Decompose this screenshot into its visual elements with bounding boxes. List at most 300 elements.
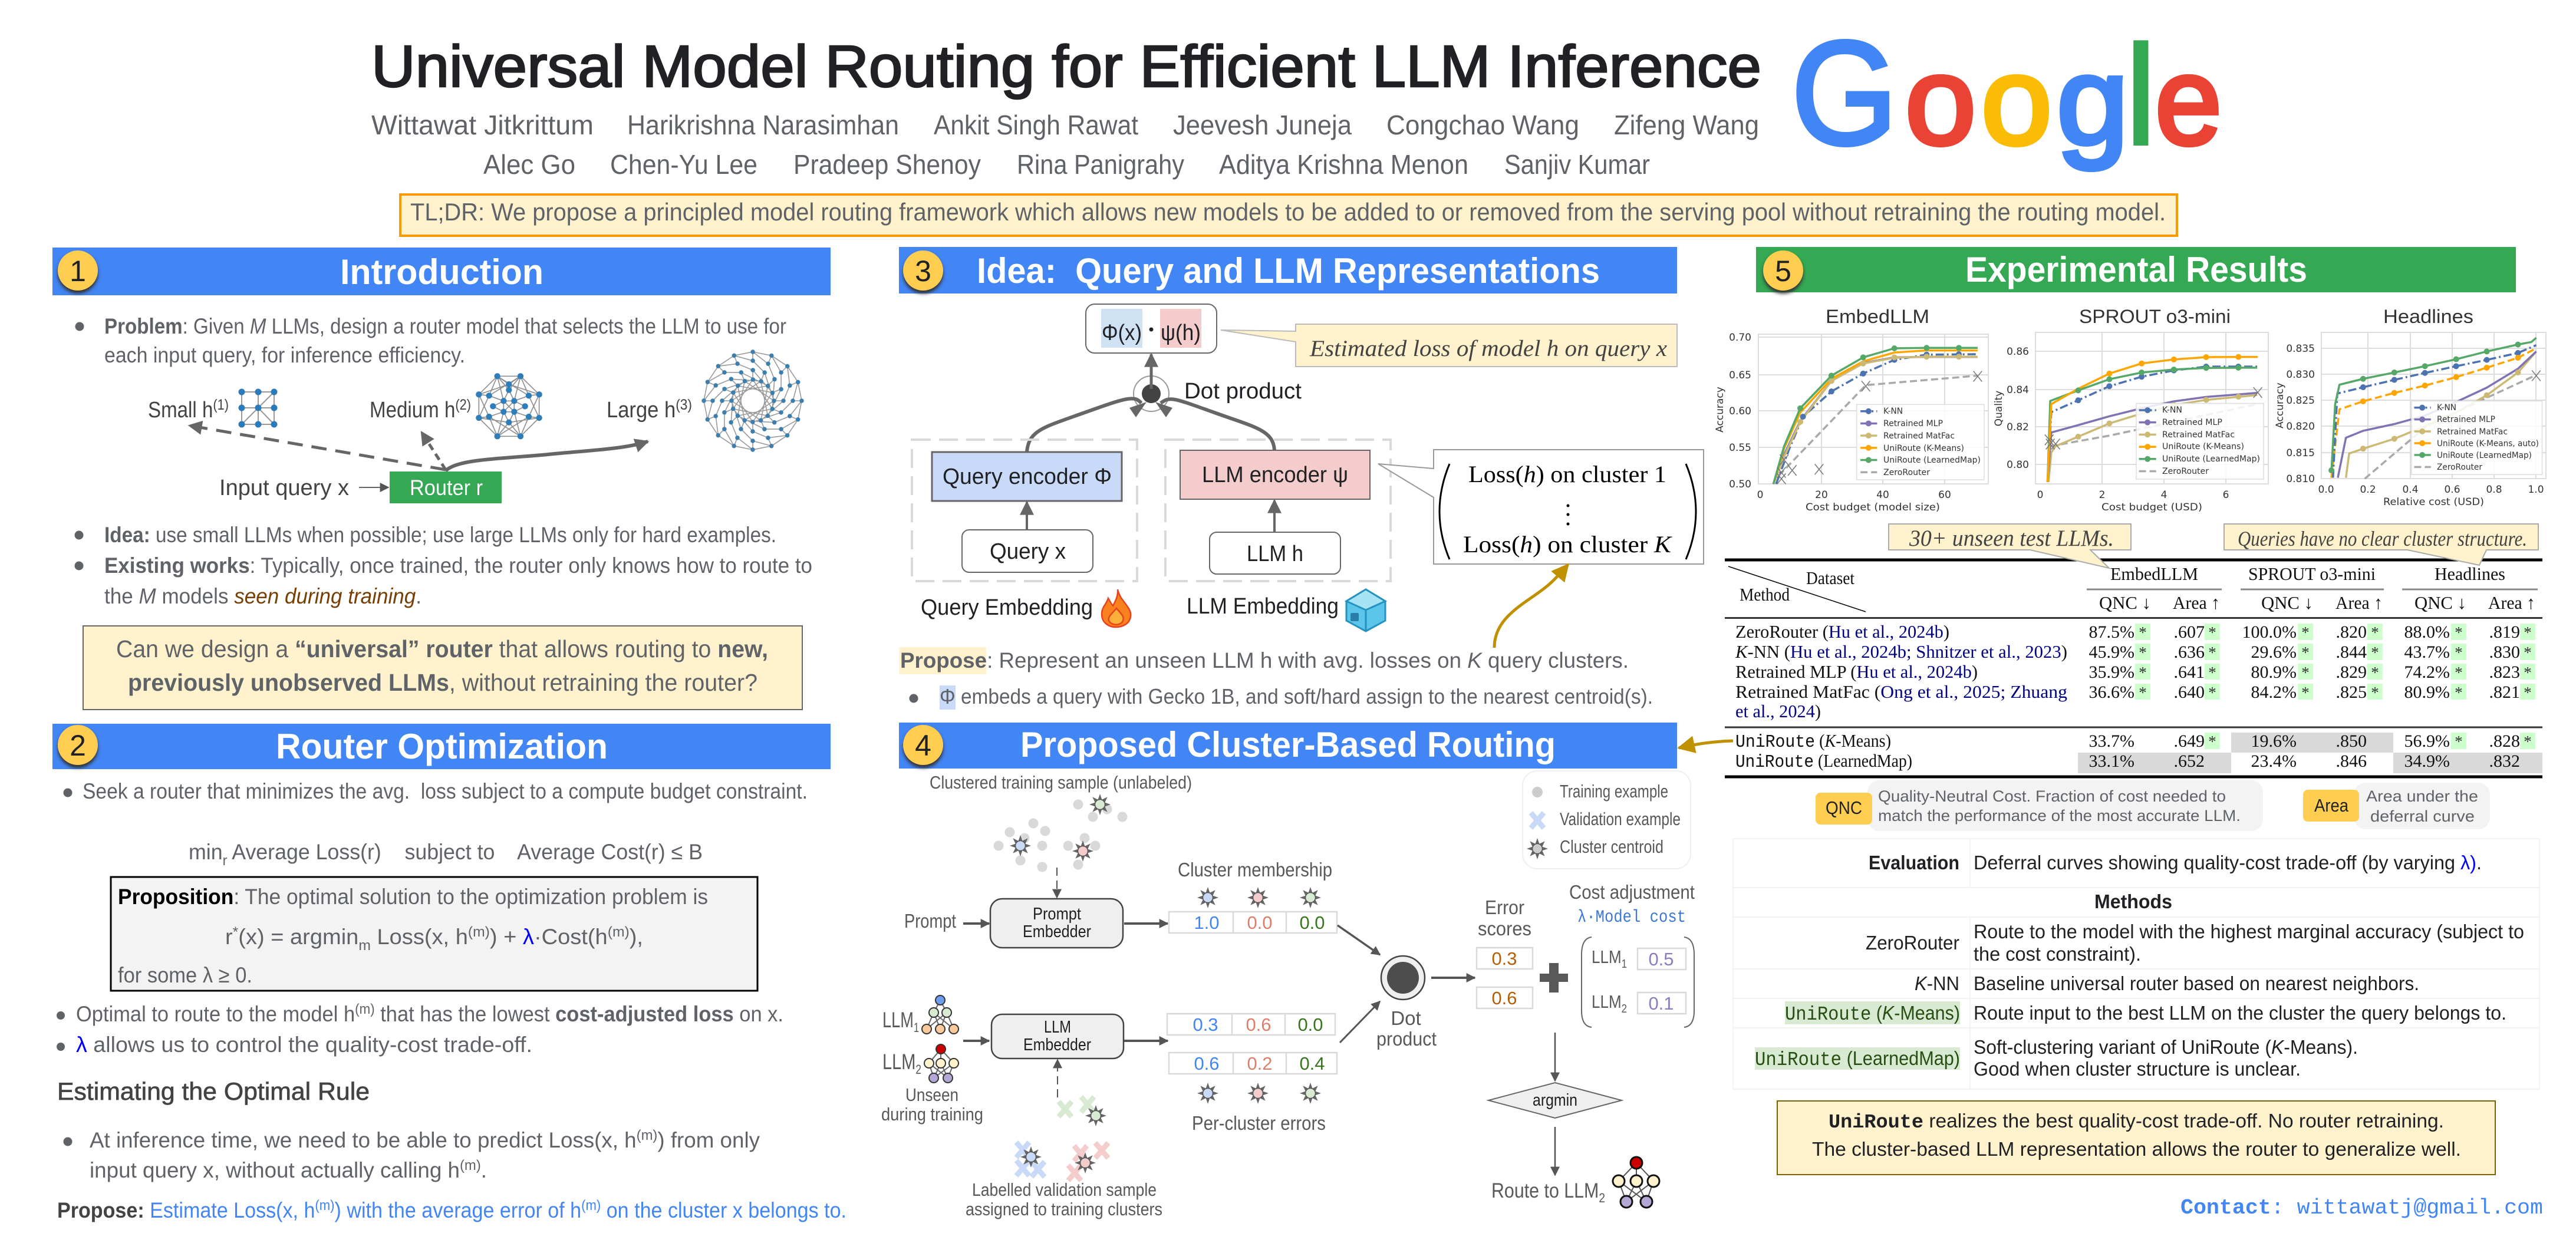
row: UniRoute K-Means: 19.6%	[2251, 731, 2297, 751]
per-cluster errors values: 0.0	[1297, 1014, 1323, 1035]
methods table	[1733, 839, 2539, 1089]
chart: SPROUT o3-mini: SPROUT o3-mini	[2079, 306, 2231, 327]
best result highlights	[2078, 733, 2542, 773]
row: Retrained MLP: 80.9%	[2251, 662, 2297, 682]
row: UniRoute LearnedMap: 33.1%	[2089, 751, 2134, 771]
router box: Router r	[410, 476, 483, 500]
chart: Headlines: 0.0	[2318, 484, 2334, 496]
scatter of validation samples	[1016, 1097, 1108, 1181]
cost adjustment: 1	[1622, 958, 1627, 971]
row: ZeroRouter: *	[2371, 624, 2379, 641]
cost adjustment: 0.1	[1648, 993, 1674, 1014]
label: dot product: Dot	[1391, 1007, 1421, 1029]
matrix callout: Loss(h) on cluster 1	[1468, 461, 1666, 487]
row: ZeroRouter: *	[2524, 624, 2532, 641]
chart: Headlines	[2274, 306, 2546, 508]
row: Retrained MatFac: 84.2%	[2251, 682, 2297, 702]
header: columns: Area ↑	[2335, 592, 2383, 613]
optimal route bullets: Optimal to route to the model h	[76, 1002, 375, 1026]
error scores: Error	[1485, 896, 1524, 918]
idea and existing works: Idea: use small LLMs when possible; use large LLMs only for hard examples.	[104, 523, 776, 547]
label: LLM embedding: LLM Embedding	[1187, 594, 1339, 619]
row: Retrained MLP: Retrained MLP (Hu et al., 2024b)	[1735, 661, 1978, 682]
chart: Headlines: 0.820	[2286, 421, 2315, 433]
authors: Pradeep Shenoy	[793, 149, 981, 180]
badge 3: 3	[915, 255, 931, 288]
optimal route bullets	[57, 1001, 783, 1057]
chart: Headlines: 0.835	[2286, 343, 2315, 355]
row: K-NN	[1735, 641, 2532, 662]
chart: EmbedLLM: Cost budget (model size)	[1806, 502, 1940, 513]
arrow: to small model	[189, 426, 446, 470]
inference text: input query x, without actually calling h	[90, 1158, 462, 1182]
chart: EmbedLLM: UniRoute (K-Means)	[1883, 444, 1964, 453]
chart: Headlines: UniRoute (K-Means, auto)	[2437, 439, 2539, 449]
header: columns: Area ↑	[2488, 592, 2535, 613]
chart: Headlines: 0.6	[2444, 484, 2460, 496]
prompt embedder box: Prompt	[1033, 905, 1081, 924]
label: labelled validation sample: Labelled validation sample	[972, 1179, 1157, 1200]
membership values	[1169, 912, 1337, 933]
chart: Headlines: Retrained MatFac	[2437, 427, 2508, 437]
header: columns: QNC ↓	[2414, 592, 2466, 613]
chart: EmbedLLM: 40	[1876, 489, 1889, 501]
icon: LLM2 network	[924, 1044, 958, 1083]
chart: EmbedLLM: UniRoute (LearnedMap)	[1883, 456, 1981, 465]
row: Retrained MatFac: *	[2524, 684, 2532, 701]
heading: query and LLM representations: Idea: Query and LLM Representations	[977, 251, 1600, 291]
row: K-NN: K-NN (Hu et al., 2024b; Shnitzer et al., 2023)	[1735, 641, 2067, 662]
arrowheads at dot	[1129, 402, 1172, 417]
prompt embedder box	[990, 899, 1123, 948]
label: clustered training sample: Clustered training sample (unlabeled)	[930, 772, 1192, 793]
panel: router optimization	[52, 724, 846, 1222]
label: small model: Small h	[148, 398, 223, 423]
chart: EmbedLLM: Accuracy	[1714, 387, 1726, 433]
definition: Area: Area	[2314, 795, 2349, 816]
header: columns: EmbedLLM	[2110, 563, 2198, 584]
row: UniRoute LearnedMap: UniRoute (LearnedMap)	[1755, 1047, 1960, 1071]
row: UniRoute K-Means	[1735, 730, 2532, 753]
authors: Jeevesh Juneja	[1173, 110, 1352, 140]
label: large model: Large h	[607, 398, 683, 423]
optimal route bullets: (m)	[355, 1001, 375, 1017]
arrow: membership to dot	[1338, 925, 1380, 955]
row: ZeroRouter: 87.5%	[2089, 622, 2134, 642]
row: Retrained MLP	[1735, 661, 2532, 682]
row: UniRoute LearnedMap: .652	[2174, 751, 2205, 771]
row: UniRoute K-Means: UniRoute (K-Means)	[1785, 1002, 1960, 1026]
LLM h box	[1210, 532, 1340, 574]
inference text: .	[481, 1158, 487, 1182]
label: query embedding: Query Embedding	[921, 595, 1093, 620]
proposition box: Loss(x, h	[371, 925, 468, 949]
label: dot product: product	[1376, 1028, 1437, 1050]
row: Retrained MLP: *	[2455, 664, 2463, 681]
chart: EmbedLLM: EmbedLLM	[1826, 306, 1929, 327]
proposition box: for some λ ≥ 0.	[118, 963, 252, 987]
chart: Headlines: Relative cost (USD)	[2383, 496, 2484, 508]
dataset group rules	[2087, 588, 2538, 591]
callout: unseen test LLMs	[1889, 524, 2131, 568]
header: columns: Headlines	[2435, 563, 2505, 584]
optimization formula: Average Loss(r) subject to Average Cost(r) ≤ B	[227, 840, 703, 864]
conclusion box: The cluster-based LLM representation allows the router to generalize well.	[1812, 1138, 2461, 1160]
centroids row bottom	[1197, 1083, 1321, 1104]
conclusion box	[1777, 1101, 2495, 1175]
significance highlights	[2135, 624, 2535, 749]
row: ZeroRouter: the cost constraint).	[1974, 943, 2141, 965]
header: dataset and method: Dataset	[1806, 568, 1854, 588]
row: Retrained MatFac: *	[2139, 684, 2147, 701]
proposition box: (m)	[468, 924, 490, 940]
row: Retrained MatFac: *	[2371, 684, 2379, 701]
title: Universal Model Routing for Efficient LLM Inference	[371, 34, 1761, 100]
icon: LLM1 network	[922, 995, 958, 1034]
chart: EmbedLLM: 0.70	[1729, 332, 1751, 344]
row: K-NN: .844	[2335, 642, 2367, 662]
arrow: input to router	[359, 487, 388, 488]
row: UniRoute K-Means	[1785, 1001, 2506, 1026]
chart: SPROUT o3-mini: 0.84	[2007, 384, 2029, 396]
row: UniRoute K-Means: .649	[2174, 731, 2205, 751]
row: K-NN: Baseline universal router based on nearest neighbors.	[1974, 972, 2419, 994]
chart: EmbedLLM: ZeroRouter	[1883, 468, 1930, 477]
error scores: 0.6	[1491, 988, 1517, 1008]
chart: Headlines: 0.810	[2286, 473, 2315, 485]
authors: Zifeng Wang	[1614, 110, 1759, 140]
panel: experimental results	[1714, 247, 2546, 1220]
row: Retrained MatFac: *	[2208, 684, 2216, 701]
row: ZeroRouter: .819	[2489, 622, 2520, 642]
per-cluster errors values	[1167, 1014, 1337, 1074]
legend: Cluster centroid	[1560, 836, 1663, 857]
heading: introduction: Introduction	[340, 252, 543, 292]
chart: SPROUT o3-mini: 0.86	[2007, 346, 2029, 358]
per-cluster errors values: 0.6	[1194, 1053, 1220, 1074]
chart: SPROUT o3-mini: Retrained MatFac	[2162, 430, 2235, 440]
row: UniRoute LearnedMap: .846	[2335, 751, 2367, 771]
panel: cluster-based routing	[881, 723, 1733, 1219]
arrow: validation to LLM embedder	[1057, 1060, 1058, 1097]
authors: Rina Panigrahy	[1017, 149, 1184, 180]
chart: SPROUT o3-mini: 0	[2037, 489, 2043, 501]
row: ZeroRouter: *	[2455, 624, 2463, 641]
row: Retrained MLP: 74.2%	[2404, 662, 2450, 682]
Google logo: G	[1791, 11, 1898, 175]
membership values: 0.0	[1299, 912, 1325, 933]
row: K-NN: *	[2208, 644, 2216, 661]
row: Retrained MLP: *	[2301, 664, 2310, 681]
panel: idea	[899, 247, 1704, 710]
LLM embedder box: Embedder	[1023, 1036, 1091, 1054]
icon: medium network	[479, 376, 539, 436]
dot product node	[1381, 956, 1425, 1000]
argmin diamond: argmin	[1533, 1091, 1577, 1110]
per-cluster errors values: 0.6	[1246, 1014, 1271, 1035]
row: ZeroRouter	[1735, 621, 2532, 642]
header: dataset and method: Method	[1740, 584, 1790, 605]
arrow: dot to error scores	[1431, 977, 1475, 979]
row: Retrained MLP: *	[2208, 664, 2216, 681]
proposition box: λ·Cost(h	[523, 925, 605, 949]
row: UniRoute K-Means: .850	[2335, 731, 2367, 751]
chart: EmbedLLM: 20	[1815, 489, 1828, 501]
authors: Sanjiv Kumar	[1504, 149, 1650, 180]
route to LLM2: Route to LLM	[1491, 1179, 1615, 1202]
row: ZeroRouter: *	[2301, 624, 2310, 641]
proposition box: (m)	[608, 924, 630, 940]
plus sign	[1540, 963, 1568, 992]
heading: introduction	[52, 248, 831, 295]
definition: QNC: Quality-Neutral Cost. Fraction of cost needed to	[1878, 787, 2226, 805]
proposition box: Proposition: The optimal solution to the optimization problem is	[118, 885, 708, 909]
dashed frame: query embedding	[912, 440, 1137, 581]
query x box	[962, 530, 1093, 572]
table sub rules	[1725, 618, 2542, 727]
optimal route bullets: cost-adjusted loss on x.	[555, 1002, 787, 1026]
contact: Contact: wittawatj@gmail.com	[2180, 1196, 2543, 1220]
heading: router optimization	[52, 724, 831, 769]
proposition box: (x) = argmin	[238, 925, 358, 949]
row: Retrained MatFac: et al., 2024)	[1735, 701, 1821, 721]
row: UniRoute K-Means: 33.7%	[2089, 731, 2134, 751]
label: medium model: Medium h	[370, 398, 468, 423]
row: UniRoute LearnedMap	[1755, 1036, 2358, 1080]
header: columns: Area ↑	[2173, 592, 2220, 613]
cost adjustment: 0.5	[1648, 949, 1674, 970]
inference text: ) from only	[657, 1128, 760, 1152]
dashed frame: LLM embedding	[1165, 440, 1391, 581]
badge 5	[1763, 250, 1803, 294]
row: K-NN: *	[2524, 644, 2532, 661]
inference text: (m)	[460, 1158, 481, 1173]
chart: SPROUT o3-mini: K-NN	[2162, 405, 2182, 415]
TL;DR banner	[400, 194, 2177, 236]
chart: Headlines: 0.825	[2286, 395, 2315, 407]
label: dot product: Dot product	[1184, 379, 1302, 404]
chart: SPROUT o3-mini: Retrained MLP	[2162, 418, 2222, 427]
proposition box	[111, 877, 757, 991]
arrow: gold from table to heading	[1679, 741, 1733, 748]
problem text	[75, 314, 786, 367]
chart: SPROUT o3-mini: Cost budget (USD)	[2101, 502, 2202, 513]
error scores	[1477, 896, 1533, 1008]
row: K-NN: 43.7%	[2404, 642, 2450, 662]
Google logo: e	[2155, 31, 2222, 170]
row: UniRoute K-Means: Route input to the best LLM on the cluster the query belongs to.	[1974, 1002, 2506, 1024]
chart: Headlines: K-NN	[2437, 403, 2456, 413]
dot product formula box: Φ(x)	[1102, 321, 1142, 345]
scatter of training samples	[999, 794, 1122, 867]
row: Retrained MatFac: .821	[2489, 682, 2520, 702]
heading: methods: Methods	[2094, 891, 2172, 912]
query x box: Query x	[990, 539, 1066, 564]
badge 4: 4	[915, 729, 931, 762]
dot product formula box: ψ(h)	[1161, 321, 1201, 345]
query encoder box	[932, 452, 1122, 501]
label: cluster membership: Cluster membership	[1178, 859, 1332, 881]
arrow: gold to matrix	[1494, 565, 1568, 648]
chart: Headlines: 0.830	[2286, 369, 2315, 381]
heading: experimental results	[1756, 247, 2516, 292]
question callout	[83, 626, 802, 710]
row: UniRoute LearnedMap	[1735, 750, 2520, 773]
chart: EmbedLLM: K-NN	[1883, 407, 1903, 416]
authors: Harikrishna Narasimhan	[627, 110, 899, 140]
centroids row top	[1197, 887, 1321, 908]
query encoder box: Query encoder Φ	[943, 464, 1112, 489]
proposition box: r	[225, 925, 232, 949]
row: ZeroRouter	[1866, 921, 2524, 965]
row: UniRoute K-Means: .828	[2489, 731, 2520, 751]
cost adjustment: LLM	[1592, 991, 1627, 1012]
definition: Area: deferral curve	[2370, 807, 2475, 825]
optimal route bullets: λ allows us to control the quality-cost trade-off.	[76, 1033, 532, 1057]
chart: SPROUT o3-mini	[1993, 306, 2268, 513]
header: columns: QNC ↓	[2099, 592, 2151, 613]
problem text: each input query, for inference efficiency.	[104, 343, 465, 367]
arrow: to medium model	[421, 432, 446, 470]
optimization formula: min	[189, 840, 224, 864]
subheading: estimating the optimal rule: Estimating the Optimal Rule	[57, 1077, 370, 1105]
row: ZeroRouter: ZeroRouter (Hu et al., 2024b)	[1735, 621, 1949, 642]
proposition box: *	[233, 924, 238, 940]
chart: SPROUT o3-mini: 2	[2099, 489, 2105, 501]
arrow: LLM embedder out	[1124, 1040, 1168, 1042]
header: columns	[2099, 563, 2535, 613]
callout: estimated loss	[1221, 324, 1677, 367]
dot product node	[1134, 376, 1169, 411]
arrow: prompt embedder out	[1124, 922, 1168, 925]
authors	[371, 110, 1759, 180]
per-cluster errors values: 0.2	[1247, 1053, 1273, 1074]
panel: introduction	[52, 248, 831, 710]
row: Retrained MLP: *	[2524, 664, 2532, 681]
icon: large network	[692, 340, 813, 461]
row: Retrained MatFac: *	[2301, 684, 2310, 701]
phi bullet: Φ embeds a query with Gecko 1B, and soft/hard assign to the nearest centroid(s).	[940, 684, 1653, 708]
badge 4	[903, 725, 943, 768]
chart: SPROUT o3-mini: ZeroRouter	[2162, 467, 2209, 476]
cost adjustment: λ·Model cost	[1577, 908, 1686, 928]
definition: QNC	[1816, 780, 2263, 831]
matrix callout: Loss(h) on cluster K	[1463, 531, 1673, 558]
chart: SPROUT o3-mini: UniRoute (LearnedMap)	[2162, 454, 2260, 464]
row: Retrained MatFac: Retrained MatFac (Ong et al., 2025; Zhuang	[1735, 681, 2067, 702]
row: evaluation: Deferral curves showing quality-cost trade-off (by varying λ).	[1974, 852, 2482, 873]
row: UniRoute LearnedMap: 23.4%	[2251, 751, 2297, 771]
label: LLM1: 1	[914, 1020, 919, 1035]
row: UniRoute LearnedMap: 34.9%	[2404, 751, 2450, 771]
label: per-cluster errors: Per-cluster errors	[1192, 1112, 1326, 1134]
chart: Headlines: 0.4	[2402, 484, 2419, 496]
row: K-NN: *	[2455, 644, 2463, 661]
row: Retrained MLP: .829	[2335, 662, 2367, 682]
row: Retrained MatFac: .640	[2174, 682, 2205, 702]
definition: Area	[2303, 783, 2490, 829]
Google logo	[1791, 11, 2222, 175]
legend	[1523, 771, 1691, 869]
routing diagram	[148, 340, 813, 503]
arrow: dot to formula	[1149, 354, 1153, 389]
label: dot product	[1376, 1007, 1437, 1050]
badge 3	[903, 250, 943, 294]
chart: EmbedLLM: 0.50	[1729, 479, 1751, 490]
arrow: LLM encoder to dot	[1161, 399, 1274, 450]
Google logo: g	[2057, 31, 2129, 170]
optimal route bullets: that has the lowest	[375, 1002, 555, 1026]
propose line: on the cluster x belongs to.	[601, 1198, 846, 1222]
chart: Headlines: 0.8	[2486, 484, 2502, 496]
cost adjustment: LLM	[1592, 947, 1627, 967]
LLM embedder box	[991, 1014, 1124, 1059]
row: Retrained MLP: *	[2139, 664, 2147, 681]
row: Retrained MatFac: *	[2455, 684, 2463, 701]
badge 5: 5	[1775, 255, 1791, 288]
heading: proposed cluster-based routing	[899, 723, 1677, 769]
proposition box: ),	[630, 925, 643, 949]
label: medium model: (2)	[455, 397, 471, 413]
chart: EmbedLLM: 0.55	[1729, 442, 1751, 454]
header: columns: SPROUT o3-mini	[2248, 563, 2376, 584]
row: ZeroRouter: 100.0%	[2242, 622, 2297, 642]
chart: Headlines: 0.815	[2286, 447, 2315, 459]
row: Retrained MLP: 35.9%	[2089, 662, 2134, 682]
row: K-NN: .636	[2174, 642, 2205, 662]
idea and existing works	[74, 523, 812, 608]
row: evaluation: Evaluation	[1869, 852, 1959, 873]
row: UniRoute K-Means: UniRoute (K-Means)	[1735, 730, 1891, 753]
route to LLM2: 2	[1599, 1191, 1605, 1205]
row: K-NN: 45.9%	[2089, 642, 2134, 662]
label: LLM2: LLM	[882, 1050, 925, 1074]
legend: Training example	[1560, 781, 1668, 802]
row: K-NN: *	[2371, 644, 2379, 661]
label: unseen during training: during training	[881, 1104, 983, 1125]
LLM encoder box	[1180, 450, 1370, 499]
icon: small network	[242, 392, 274, 424]
arrow: to large model	[446, 441, 648, 471]
row: ZeroRouter: ZeroRouter	[1866, 932, 1959, 954]
row: UniRoute K-Means: 56.9%	[2404, 731, 2450, 751]
error scores: scores	[1478, 918, 1531, 939]
label: large model: (3)	[676, 397, 692, 413]
table rules	[1725, 560, 2542, 777]
chart: Headlines: Headlines	[2383, 306, 2473, 327]
chart: EmbedLLM	[1714, 306, 1988, 513]
chart: SPROUT o3-mini: 4	[2161, 489, 2167, 501]
prompt embedder box: Embedder	[1023, 922, 1091, 941]
per-cluster errors values: 0.4	[1299, 1053, 1325, 1074]
row: ZeroRouter: *	[2139, 624, 2147, 641]
label: LLM2: 2	[915, 1062, 921, 1077]
idea and existing works: the M models seen during training.	[104, 584, 421, 608]
LLM h box: LLM h	[1247, 542, 1303, 566]
row: UniRoute LearnedMap: Soft-clustering variant of UniRoute (K-Means).	[1974, 1036, 2358, 1058]
callout: unseen test LLMs: 30+ unseen test LLMs.	[1909, 526, 2114, 551]
question callout: previously unobserved LLMs, without retraining the router?	[128, 669, 757, 696]
heading: proposed cluster-based routing: Proposed Cluster-Based Routing	[1020, 725, 1556, 764]
label: unseen during training: Unseen	[905, 1084, 958, 1105]
propose line: ) with the average error of h	[335, 1198, 581, 1222]
chart: SPROUT o3-mini: 6	[2223, 489, 2229, 501]
chart: SPROUT o3-mini: UniRoute (K-Means)	[2162, 442, 2244, 451]
membership values: 1.0	[1194, 912, 1220, 933]
icon: routed network	[1613, 1157, 1659, 1208]
propose line: (m)	[315, 1198, 335, 1214]
seek text: Seek a router that minimizes the avg. loss subject to a compute budget constraint.	[83, 779, 808, 803]
